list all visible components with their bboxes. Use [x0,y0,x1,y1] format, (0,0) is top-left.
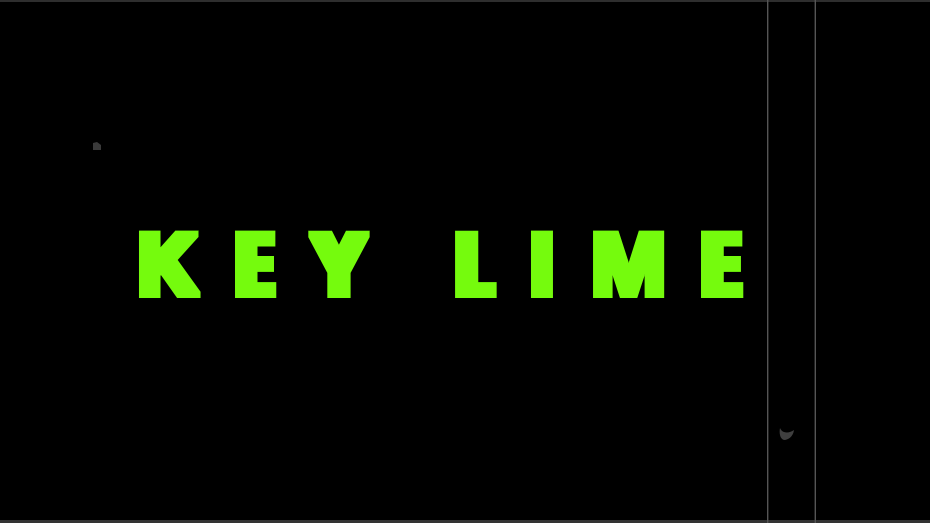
title: KEY LIME: K [139,215,196,314]
speck: small grey mark upper left [93,142,101,150]
title: KEY LIME: I [528,215,555,314]
title: KEY LIME: Y [313,215,365,314]
title: KEY LIME: M [591,215,666,314]
title: KEY LIME [139,214,737,315]
title: KEY LIME: L [460,216,490,315]
title: KEY LIME: E [706,216,737,315]
speck: small grey crescent lower right [780,428,794,440]
title: KEY LIME: E [240,214,270,314]
